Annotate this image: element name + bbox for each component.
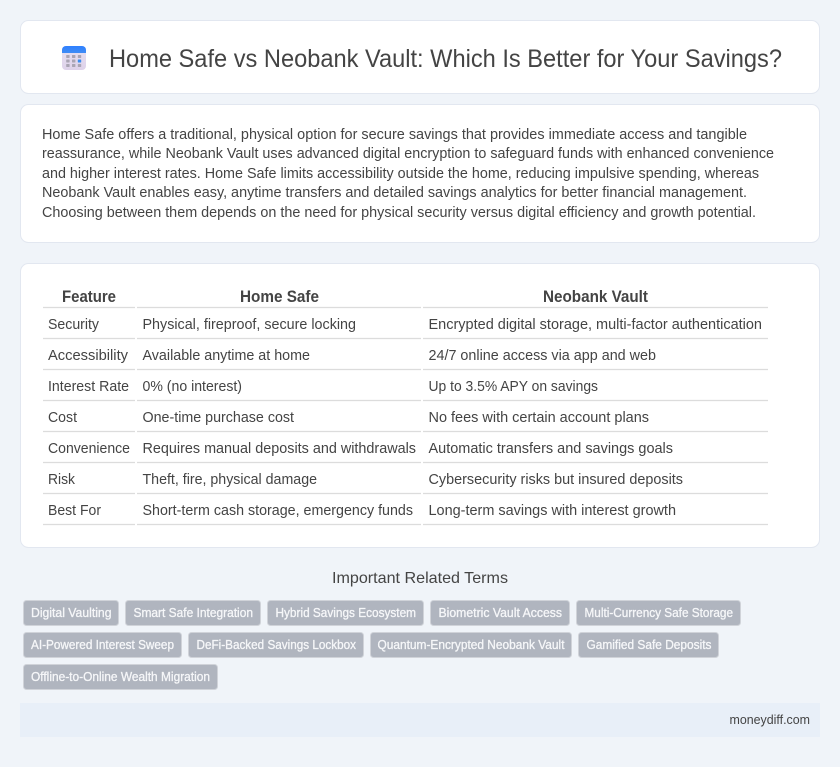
text block: summary: Home Safe offers a traditional, physical option for secure savings that provides immediate access and tangible bbox=[42, 127, 747, 143]
tag: Quantum-Encrypted Neobank Vault bbox=[370, 632, 572, 658]
table row: Interest Rate: 0% (no interest) bbox=[142, 379, 242, 395]
icon: calendar bbox=[62, 46, 86, 70]
table row: Security: Encrypted digital storage, multi-factor authentication bbox=[428, 317, 762, 333]
table row: Best For bbox=[43, 503, 768, 524]
table row: Accessibility: Accessibility bbox=[48, 348, 129, 364]
table row: Interest Rate bbox=[43, 379, 768, 400]
table row: Security: Security bbox=[48, 317, 100, 333]
table row: Risk: Risk bbox=[48, 472, 76, 488]
table row: Risk bbox=[43, 472, 768, 494]
table header row: Neobank Vault bbox=[543, 288, 648, 306]
tag: Digital Vaulting: Digital Vaulting bbox=[31, 606, 112, 620]
text block: summary: Choosing between them depends on the need for physical security versus digital efficiency and growth potential. bbox=[42, 205, 756, 221]
tag: DeFi-Backed Savings Lockbox bbox=[188, 632, 364, 658]
table row: Cost: One-time purchase cost bbox=[142, 410, 294, 426]
table row: Best For: Best For bbox=[48, 503, 101, 519]
tag: DeFi-Backed Savings Lockbox: DeFi-Backed Savings Lockbox bbox=[196, 638, 357, 652]
table header row: Feature bbox=[62, 288, 116, 306]
tag: Smart Safe Integration bbox=[126, 600, 260, 626]
table row: Accessibility: 24/7 online access via app and web bbox=[428, 348, 656, 364]
footer source text: moneydiff.com bbox=[730, 712, 810, 727]
tag: Multi-Currency Safe Storage bbox=[576, 600, 740, 626]
table row: Cost bbox=[43, 410, 768, 432]
tag: Hybrid Savings Ecosystem bbox=[268, 600, 424, 626]
table row: Best For: Long-term savings with interest growth bbox=[428, 503, 676, 519]
text block: summary: and higher interest rates. Home Safe limits accessibility outside the home, reducing impulsive spending, whereas bbox=[42, 166, 759, 182]
table row: Interest Rate: Interest Rate bbox=[48, 379, 129, 395]
tag: Biometric Vault Access: Biometric Vault Access bbox=[438, 606, 562, 620]
table row: Security bbox=[43, 317, 768, 338]
footer bbox=[20, 703, 820, 737]
table row: Cost: Cost bbox=[48, 410, 77, 426]
table header row: Home Safe bbox=[240, 288, 319, 306]
panel: summary paragraph bbox=[20, 104, 820, 242]
tag: Gamified Safe Deposits: Gamified Safe Deposits bbox=[586, 638, 712, 652]
text block: summary: Neobank Vault enables easy, anytime transfers and detailed savings analytics for better financial management. bbox=[42, 185, 747, 201]
tag: Biometric Vault Access bbox=[430, 600, 570, 626]
panel: related term tags bbox=[24, 600, 740, 690]
table row: Risk: Cybersecurity risks but insured deposits bbox=[428, 472, 683, 488]
table row: Convenience: Automatic transfers and savings goals bbox=[428, 441, 673, 457]
text block: summary: reassurance, while Neobank Vault uses advanced digital encryption to safeguard funds with enhanced convenience bbox=[42, 146, 774, 162]
heading: related terms: Important Related Terms bbox=[332, 570, 508, 587]
text block: summary bbox=[42, 127, 774, 221]
tag: Offline-to-Online Wealth Migration: Offline-to-Online Wealth Migration bbox=[31, 670, 210, 684]
table row: Security: Physical, fireproof, secure locking bbox=[142, 317, 356, 333]
tag: AI-Powered Interest Sweep: AI-Powered Interest Sweep bbox=[31, 638, 174, 652]
title: Home Safe vs Neobank Vault: Which Is Better for Your Savings? bbox=[109, 45, 782, 73]
tag: Multi-Currency Safe Storage: Multi-Currency Safe Storage bbox=[584, 606, 733, 620]
tag: Digital Vaulting bbox=[24, 600, 118, 626]
tag: Offline-to-Online Wealth Migration bbox=[24, 664, 218, 690]
table row: Risk: Theft, fire, physical damage bbox=[142, 472, 317, 488]
table row: Accessibility: Available anytime at home bbox=[142, 348, 310, 364]
panel: comparison table bbox=[20, 264, 820, 548]
table row: Accessibility bbox=[43, 348, 768, 370]
table row: Convenience bbox=[43, 441, 768, 462]
table row: Convenience: Convenience bbox=[48, 441, 130, 457]
tag: Gamified Safe Deposits bbox=[578, 632, 718, 658]
table row: Best For: Short-term cash storage, emergency funds bbox=[142, 503, 413, 519]
tag: Hybrid Savings Ecosystem: Hybrid Savings Ecosystem bbox=[276, 606, 416, 620]
tag: Quantum-Encrypted Neobank Vault: Quantum-Encrypted Neobank Vault bbox=[378, 638, 565, 652]
panel: title header bbox=[20, 20, 820, 94]
table row: Convenience: Requires manual deposits and withdrawals bbox=[142, 441, 416, 457]
tag: Smart Safe Integration: Smart Safe Integration bbox=[134, 606, 253, 620]
table header row bbox=[43, 288, 768, 308]
tag: AI-Powered Interest Sweep bbox=[24, 632, 182, 658]
table row: Cost: No fees with certain account plans bbox=[428, 410, 649, 426]
table row: Interest Rate: Up to 3.5% APY on savings bbox=[428, 379, 598, 395]
